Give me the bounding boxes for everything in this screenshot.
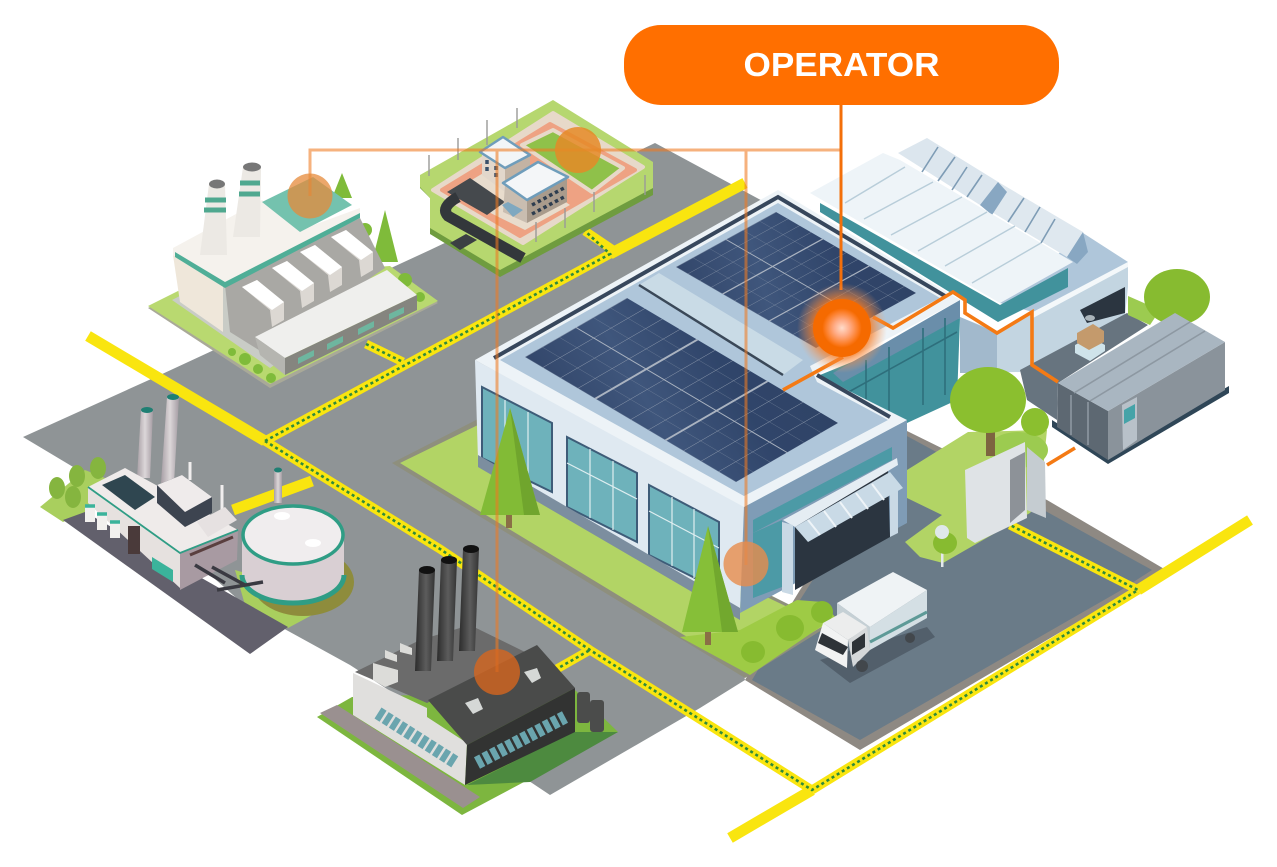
glowing operator node [797,283,887,373]
site marker: campus [555,127,601,173]
right wall [740,420,907,613]
connection lines to sites [310,150,841,672]
factory right wall [465,688,575,785]
plant: coal factory [317,545,618,815]
loading door [795,505,885,583]
factory gray roof [355,625,525,703]
process building [88,487,180,588]
solar panel array front [525,298,838,482]
site marker: coal factory [474,649,520,695]
roof slab [475,190,960,507]
wing walls [960,262,1128,373]
operator label [624,25,1059,105]
campus parking and road [447,178,505,215]
wing teal strip [820,203,1068,322]
wing white roof [810,153,1073,303]
floodlight poles [429,108,645,242]
left wall windows [482,387,719,590]
school block rear [482,153,505,192]
turbine units [242,230,373,327]
tree behind container [1128,269,1210,325]
loading apron [1020,313,1148,420]
turbine body [225,218,385,352]
skylight strip [639,273,803,375]
shrubs [228,348,276,383]
long shed [255,270,417,358]
process units [85,505,120,538]
chimneys [200,184,227,255]
sawtooth skylights [898,138,1000,205]
road surface [23,143,770,795]
solar panel array rear [676,212,916,348]
door awning [795,472,903,542]
conifer left of building [480,408,540,528]
main building lawn [392,418,835,678]
factory dark roof [428,645,575,745]
side lawn with lamp [905,430,1047,567]
orange power cabling [783,292,1075,465]
wing door opening [1080,287,1125,323]
roof vents [373,663,398,687]
yard asphalt [745,430,1166,750]
conifer at building corner [682,526,738,645]
conifers beside turbine hall [332,173,425,302]
rear wing [810,138,1128,373]
parcel robot [1075,315,1105,361]
three chimneys [415,570,435,671]
yellow power lines [88,183,1250,838]
large tree [950,367,1049,468]
site marker: main building [724,542,768,586]
plant: tank farm [40,394,354,654]
round trees [49,457,106,508]
factory left wall [353,673,467,785]
site marker: gas turbine hall [288,174,332,218]
main building [475,138,1128,620]
right glazing [820,318,960,423]
shrubs by loading door [741,601,833,663]
battery container [1052,313,1229,464]
plant: gas turbine hall [148,162,438,388]
delivery truck [815,572,935,683]
storage tank [242,535,344,603]
left wall [475,360,744,613]
operator label: OPERATOR [744,46,940,83]
operator trunk line [840,105,842,290]
campus with sports track [420,100,653,277]
electrical cabinet [965,442,1046,543]
school block front [503,185,527,223]
pipework [195,565,263,590]
base plinth [478,455,740,620]
wing rear slab [1000,233,1128,312]
factory silos [577,692,604,732]
